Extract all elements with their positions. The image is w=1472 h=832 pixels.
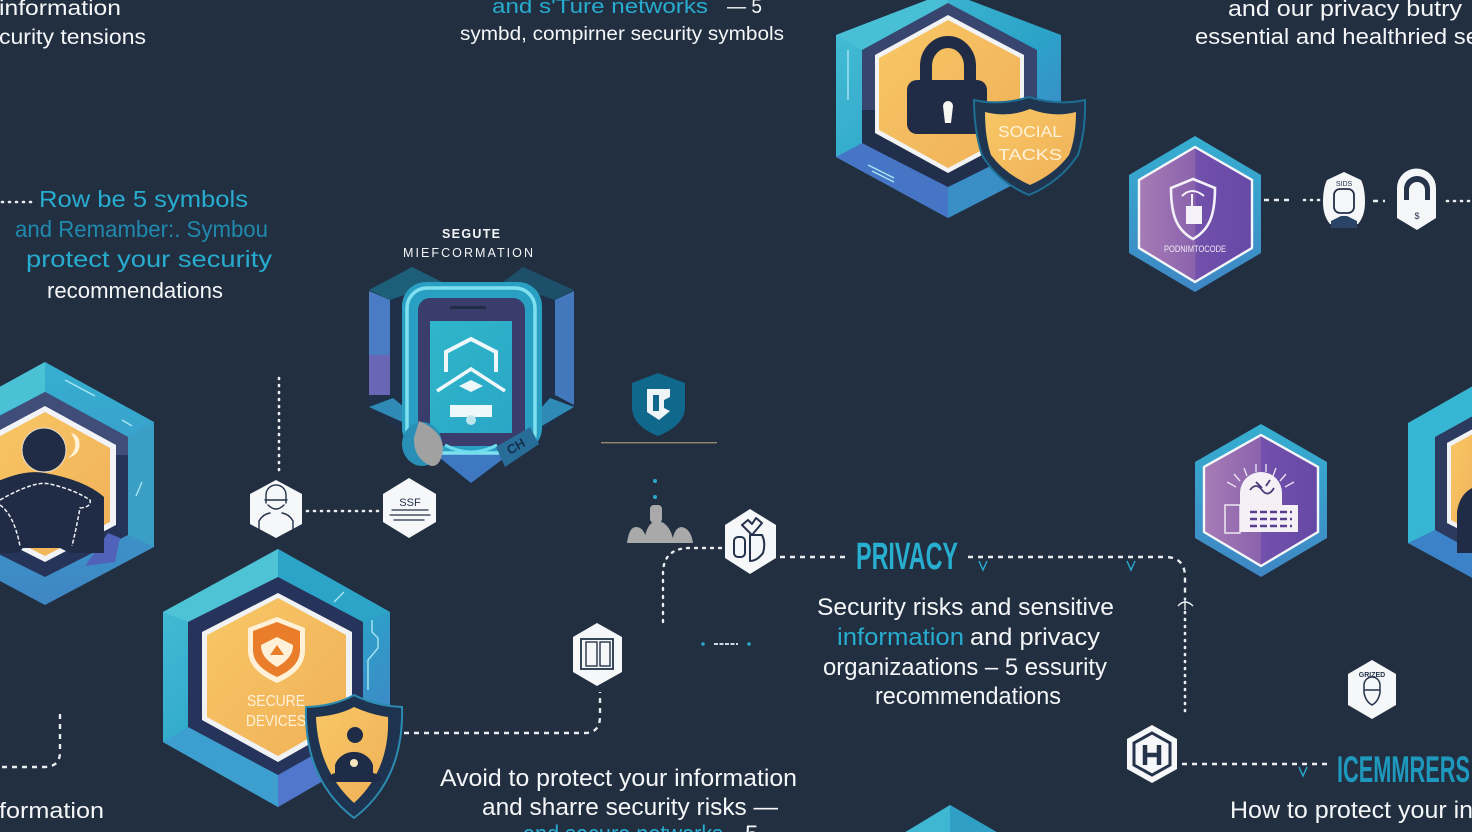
icon: person badge <box>1323 172 1365 228</box>
icon: social tacks shield <box>974 97 1085 195</box>
icon: grey key tag <box>402 421 443 466</box>
text: left security recommendations: protect your security <box>26 246 273 272</box>
icon: white data hexagon <box>725 509 776 574</box>
text: bottom left cut-off: formation <box>0 798 104 823</box>
text: avoid to protect: and sharre security risks — <box>482 794 778 821</box>
icon: padlock <box>907 42 987 134</box>
icon: person shield <box>306 695 402 818</box>
text: top centre <box>460 0 784 45</box>
panel: purple hexagon brain <box>1195 424 1327 577</box>
text: privacy description: Security risks and sensitive <box>817 594 1114 621</box>
text: top left cut-off <box>0 0 146 49</box>
text: privacy description: recommendations <box>875 683 1061 710</box>
text: top centre: symbd, compirner security symbols <box>460 24 784 45</box>
icon: white server hexagon <box>383 478 436 538</box>
icon: small teal shield <box>632 373 685 436</box>
icon: brain and server <box>1225 464 1298 533</box>
icon: person silhouette <box>0 428 108 553</box>
icon: white mask hexagon: GRIZED <box>1359 672 1385 679</box>
connector: vertical dots above worker <box>278 378 280 476</box>
icon: code band: CH <box>504 435 528 458</box>
icon: white worker hexagon <box>250 480 302 538</box>
text: top left cut-off: curity tensions <box>0 26 146 49</box>
panel: hexagon bottom centre <box>902 805 1000 832</box>
panel: purple hexagon protocol: PODNIMTOCODE <box>1164 244 1226 254</box>
heading: secure information <box>403 227 533 260</box>
connector: privacy heading to right <box>968 557 1193 714</box>
icon: white tool hexagon <box>1127 725 1177 783</box>
connector: data hexagon to privacy heading <box>780 556 848 558</box>
text: privacy description: and privacy <box>970 624 1100 651</box>
connector: bottom left <box>2 712 60 767</box>
text: avoid to protect: Avoid to protect your information <box>440 765 797 792</box>
panel: social tactics hexagon <box>836 0 1085 218</box>
heading: secure information: SEGUTE <box>442 227 500 241</box>
icon: code band <box>496 427 539 467</box>
text: privacy description: organizaations – 5 essurity <box>823 654 1107 681</box>
text: left security recommendations: and Remamber:. Symbou <box>15 216 268 242</box>
panel: secure phone hexagon <box>369 267 574 483</box>
icon: orange shield <box>248 617 305 683</box>
panel: hexagon right edge <box>1408 382 1472 582</box>
connector: dots to data hexagon <box>663 548 722 622</box>
connector: teal dots above people <box>653 479 657 499</box>
text: avoid to protect <box>440 765 797 832</box>
icon: white server hexagon: SSF <box>399 497 421 509</box>
connector: person shield to window <box>404 692 600 733</box>
icon: white window hexagon <box>573 623 622 686</box>
text: left security recommendations: Row be 5 symbols <box>39 186 248 212</box>
connector: short teal and white dots <box>701 642 751 646</box>
icon: phone <box>402 282 542 453</box>
panel: secure devices hexagon: DEVICES <box>246 713 306 730</box>
icon: white mask hexagon <box>1348 660 1396 719</box>
divider under teal shield <box>601 442 717 443</box>
connector: tool hexagon to heading <box>1182 764 1332 776</box>
icon: grey people group <box>627 505 693 543</box>
heading: secure information: MIEFCORMATION <box>403 246 533 260</box>
icon: social tacks shield: TACKS <box>998 147 1062 164</box>
connector: purple hexagon to lock <box>1264 200 1472 201</box>
panel: person hexagon left <box>0 362 154 605</box>
panel: purple hexagon protocol <box>1129 136 1261 292</box>
text: top right <box>1195 0 1472 49</box>
icon: person badge: SIDS <box>1336 181 1352 188</box>
icon: social tacks shield: SOCIAL <box>998 124 1062 141</box>
text: how to protect: How to protect your int <box>1230 797 1472 824</box>
text: privacy description <box>817 594 1114 710</box>
heading: privacy: PRIVACY <box>856 536 958 578</box>
icon: shield bottle <box>1171 179 1215 239</box>
text: top right: essential and healthried se <box>1195 24 1472 49</box>
text: privacy description: information <box>837 624 964 651</box>
panel: secure devices hexagon: SECURE <box>247 693 305 710</box>
text: left security recommendations: recommendations <box>47 278 223 303</box>
panel: secure devices hexagon <box>163 549 402 818</box>
connector: worker to network hexagon <box>307 510 379 512</box>
icon: lock badge: $ <box>1414 211 1420 221</box>
icon: lock badge <box>1397 168 1436 230</box>
text: left security recommendations <box>2 186 273 303</box>
